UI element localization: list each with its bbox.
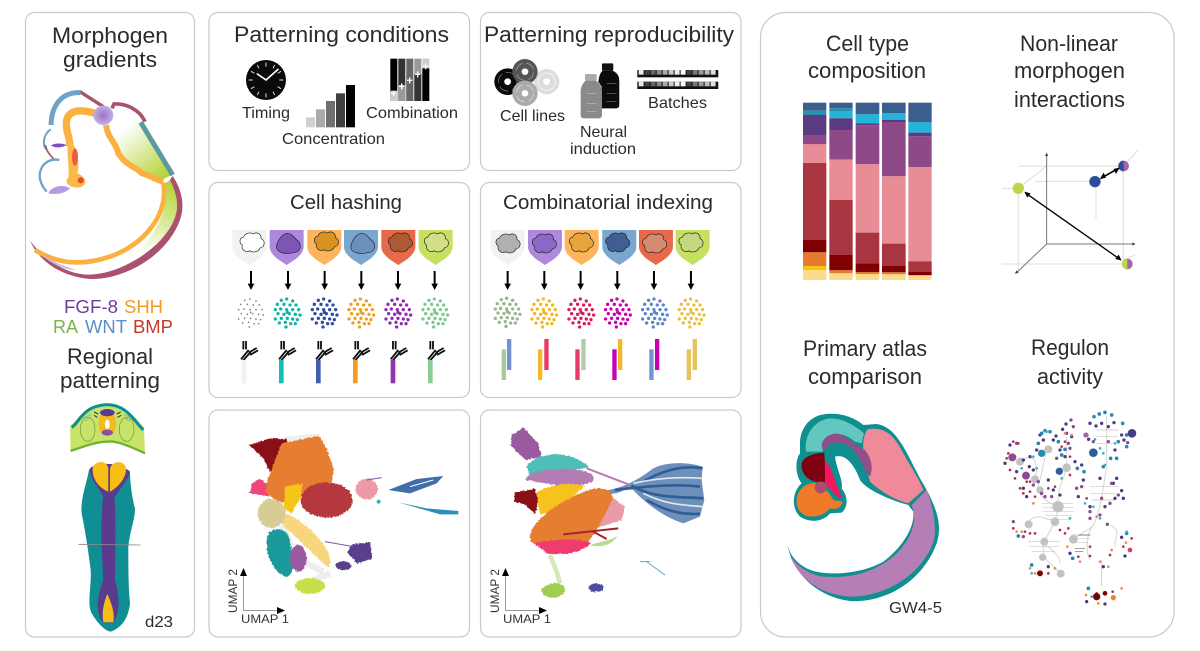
- illustration: neural plate d23: [78, 462, 141, 632]
- axis: UMAP left: UMAP 1: [241, 612, 289, 626]
- panel: cell hashing: [209, 182, 470, 398]
- label: concentration: Concentration: [282, 131, 385, 148]
- illustration: primary atlas embryo: [787, 414, 939, 601]
- axis: UMAP right: UMAP 1: [503, 612, 551, 626]
- heading: morphogen gradients: Morphogen: [52, 23, 168, 48]
- label: combination: Combination: [366, 105, 458, 122]
- heading: regional patterning: Regional: [67, 344, 153, 369]
- panel: patterning reproducibility: [480, 12, 741, 170]
- legend: morphogen names: RA: [53, 317, 78, 337]
- heading: cell type composition: composition: [808, 58, 926, 83]
- label: neural induction: [570, 124, 636, 158]
- panel: morphogen gradients and regional patterning: [26, 12, 194, 637]
- heading: primary atlas comparison: Primary atlas: [803, 336, 927, 361]
- heading: morphogen gradients: gradients: [63, 47, 157, 72]
- label: d23: d23: [145, 614, 173, 631]
- label: batches: Batches: [648, 95, 707, 112]
- network: regulon activity: [1005, 412, 1136, 604]
- illustration: neural tube cross-section: [70, 405, 145, 453]
- barcode pairs: [502, 339, 697, 380]
- label: neural induction: induction: [570, 141, 636, 158]
- heading: cell type composition: [808, 31, 926, 83]
- panel: UMAP cell hashing: [209, 410, 470, 637]
- panel: patterning conditions: [209, 12, 470, 170]
- heading: regulon activity: Regulon: [1031, 335, 1109, 360]
- heading: regulon activity: [1031, 335, 1109, 389]
- heading: primary atlas comparison: [803, 336, 927, 389]
- wells: indexing row: [491, 230, 710, 265]
- icon: combination matrix: [390, 59, 429, 101]
- heading: cell hashing: Cell hashing: [290, 192, 402, 214]
- stacked bar chart: [803, 103, 932, 280]
- heading: combinatorial indexing: Combinatorial indexing: [503, 192, 713, 214]
- panel: combinatorial indexing: [480, 182, 741, 398]
- heading: primary atlas comparison: comparison: [808, 364, 922, 389]
- legend: morphogen names: FGF-8: [64, 297, 118, 317]
- icon: neural induction bottles: [581, 63, 619, 118]
- legend: morphogen names: BMP: [133, 317, 173, 337]
- UMAP scatter right: [511, 428, 704, 597]
- arrows: hashing row: [248, 271, 438, 290]
- illustration: embryo morphogen gradients: [30, 92, 182, 279]
- UMAP scatter left: [249, 436, 458, 594]
- label: timing: Timing: [242, 105, 290, 122]
- wells: hashing row: [232, 230, 453, 265]
- icon: clock: [246, 60, 286, 100]
- label: GW4-5: GW4-5: [889, 600, 942, 617]
- heading: cell type composition: Cell type: [826, 31, 909, 56]
- cell clusters: hashing row: [239, 299, 448, 327]
- arrows: indexing row: [504, 271, 694, 290]
- axis: UMAP right: [488, 568, 551, 626]
- heading: regional patterning: [60, 344, 160, 393]
- icon: cell lines discs: [494, 59, 559, 106]
- antibodies with barcodes: [241, 341, 445, 383]
- panel: analysis: [760, 12, 1174, 637]
- heading: non-linear morphogen interactions: [1014, 31, 1125, 112]
- heading: morphogen gradients: [52, 23, 168, 72]
- axis: UMAP left: UMAP 2: [226, 569, 240, 613]
- heading: patterning reproducibility: Patterning reproducibility: [484, 22, 734, 47]
- heading: non-linear morphogen interactions: morphogen: [1014, 58, 1125, 83]
- label: cell lines: Cell lines: [500, 108, 565, 125]
- heading: regional patterning: patterning: [60, 368, 160, 393]
- 3D morphogen interaction plot: [1002, 150, 1138, 274]
- icon: batches well plates: [637, 70, 718, 89]
- panel: UMAP combinatorial indexing: [480, 410, 741, 637]
- cell clusters: indexing row: [495, 298, 704, 327]
- heading: non-linear morphogen interactions: interactions: [1014, 87, 1125, 112]
- legend: morphogen names: [53, 297, 173, 337]
- legend: morphogen names: SHH: [124, 297, 163, 317]
- heading: non-linear morphogen interactions: Non-linear: [1020, 31, 1118, 56]
- heading: patterning conditions: Patterning conditions: [234, 22, 449, 47]
- legend: morphogen names: WNT: [85, 317, 127, 337]
- axis: UMAP right: UMAP 2: [488, 569, 502, 613]
- axis: UMAP left: [226, 568, 289, 626]
- icon: concentration bars: [306, 85, 355, 127]
- heading: regulon activity: activity: [1037, 364, 1103, 389]
- label: neural induction: Neural: [580, 124, 627, 141]
